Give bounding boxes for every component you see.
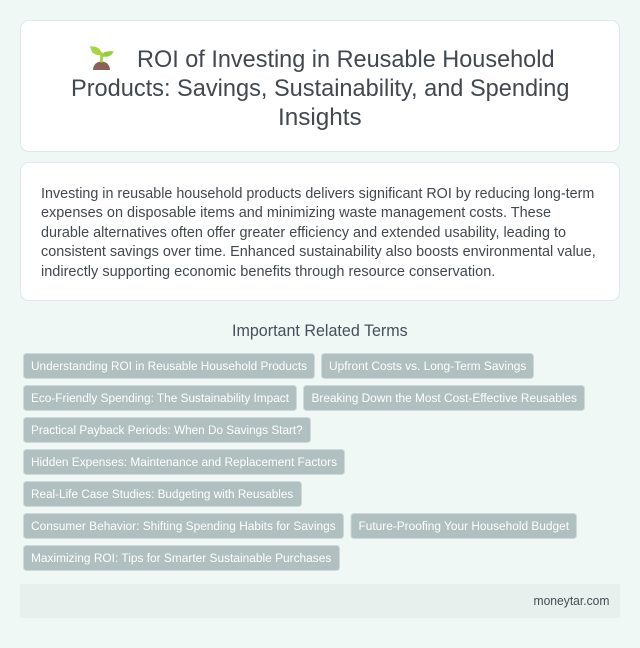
summary text: expenses on disposable items and minimizing waste management costs. These <box>41 205 551 221</box>
tag: payback periods: Practical Payback Periods: When Do Savings Start? <box>31 423 303 437</box>
heading: important related terms: Important Related Terms <box>232 322 408 340</box>
footer <box>20 584 620 618</box>
title: Insights <box>278 104 362 131</box>
icon: seedling <box>90 46 114 70</box>
tag: consumer behavior <box>24 514 344 538</box>
summary text: indirectly supporting economic benefits through resource conservation. <box>41 264 495 280</box>
summary text: durable alternatives often offer greater efficiency and extended usability, leading to <box>41 225 566 241</box>
tag: upfront costs: Upfront Costs vs. Long-Term Savings <box>329 359 526 373</box>
tag: future-proofing <box>351 514 576 538</box>
panel: related term tags <box>24 354 584 570</box>
tag: future-proofing: Future-Proofing Your Household Budget <box>358 519 570 533</box>
tag: maximizing ROI: Maximizing ROI: Tips for Smarter Sustainable Purchases <box>31 551 331 565</box>
tag: case studies <box>24 482 302 506</box>
panel: summary card <box>20 162 620 300</box>
title <box>71 46 570 131</box>
title: ROI of Investing in Reusable Household <box>137 46 554 73</box>
summary text: consistent savings over time. Enhanced sustainability also boosts environmental value, <box>41 244 596 260</box>
tag: eco-friendly spending <box>24 386 296 410</box>
tag: upfront costs <box>322 354 534 378</box>
summary text: Investing in reusable household products delivers significant ROI by reducing long-term <box>41 186 594 202</box>
tag: understanding ROI <box>24 354 314 378</box>
tag: maximizing ROI <box>24 546 340 570</box>
tag: understanding ROI: Understanding ROI in Reusable Household Products <box>31 359 307 373</box>
title: Products: Savings, Sustainability, and Spending <box>71 75 570 102</box>
tag: payback periods <box>24 418 310 442</box>
tag: breaking down: Breaking Down the Most Cost-Effective Reusables <box>312 391 577 405</box>
summary text <box>41 186 596 280</box>
tag: case studies: Real-Life Case Studies: Budgeting with Reusables <box>31 487 293 501</box>
tag: consumer behavior: Consumer Behavior: Shifting Spending Habits for Savings <box>31 519 336 533</box>
tag: breaking down <box>304 386 584 410</box>
footer source text: moneytar.com <box>534 593 610 608</box>
tag: eco-friendly spending: Eco-Friendly Spending: The Sustainability Impact <box>31 391 290 405</box>
panel: title card <box>20 20 620 152</box>
tag: hidden expenses <box>24 450 344 474</box>
tag: hidden expenses: Hidden Expenses: Maintenance and Replacement Factors <box>31 455 337 469</box>
